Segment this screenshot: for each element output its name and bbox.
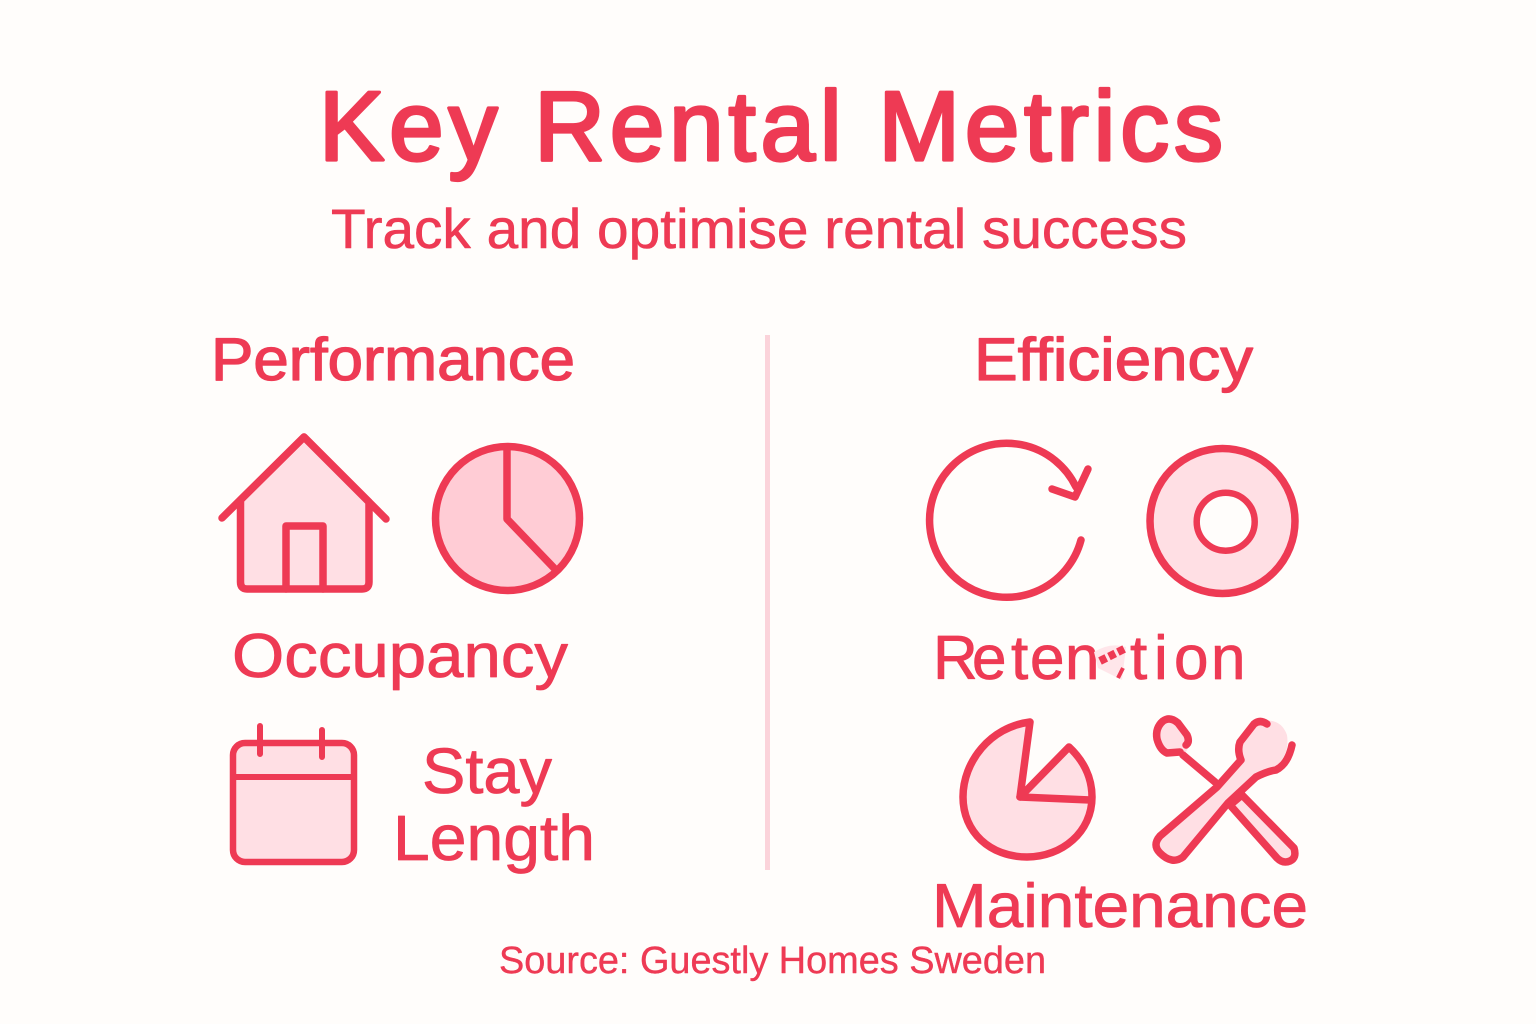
icon: crossed tools [1156,719,1295,862]
label: maintenance: Maintenance [932,872,1308,941]
heading: performance: Performance [211,326,575,393]
label: stay length: Length [393,802,595,874]
title: Key Rental Metrics [319,71,1223,181]
panel: efficiency [930,326,1308,941]
label: retention: Retention [933,624,1245,693]
panel: performance [211,326,595,874]
source note: Source: Guestly Homes Sweden [499,940,1046,982]
icon: retention arrow [930,443,1088,597]
icon: pie with slice cut [963,722,1092,857]
icon: calendar [233,726,354,862]
center divider [765,335,770,870]
heading: efficiency: Efficiency [974,326,1253,393]
label: occupancy: Occupancy [232,622,568,691]
icon: pie clock [436,446,580,590]
icon: house [222,437,386,589]
label: stay length [393,735,595,874]
label: stay length: Stay [422,735,552,807]
icon: donut [1150,448,1295,594]
glitch patch over label [1094,645,1126,680]
subtitle: Track and optimise rental success [331,197,1187,260]
